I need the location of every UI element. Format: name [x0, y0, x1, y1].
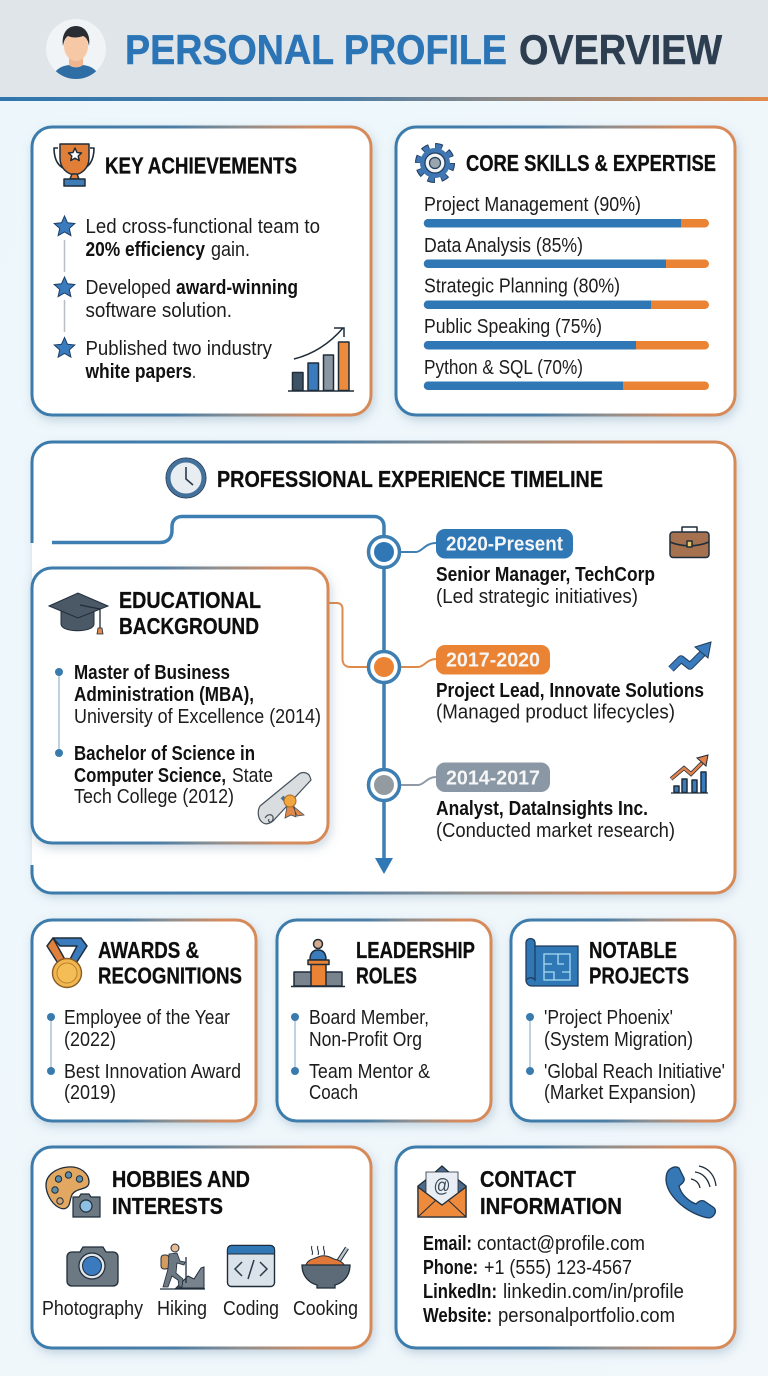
achievements text: Published two industry — [86, 338, 272, 360]
icon: trophy — [54, 144, 94, 186]
achievements text — [85, 216, 320, 383]
bullet rail — [526, 1013, 534, 1075]
heading: NOTABLE — [589, 937, 677, 963]
website line — [423, 1305, 675, 1327]
heading — [356, 937, 475, 988]
heading: BACKGROUND — [119, 613, 259, 639]
entry: 2014-2017: (Conducted market research) — [436, 820, 675, 842]
hobby: coding — [223, 1246, 279, 1320]
timeline connectors — [329, 543, 436, 785]
skill: python and sql: Python & SQL (70%) — [424, 357, 583, 379]
icon: clock — [166, 458, 206, 498]
degree: bachelor: Bachelor of Science in — [74, 743, 255, 765]
skill: strategic planning: Strategic Planning (80%) — [424, 276, 620, 298]
projects list: (System Migration) — [544, 1029, 693, 1051]
timeline axis with arrow — [52, 516, 393, 874]
heading: HOBBIES AND — [112, 1166, 250, 1192]
awards list: Best Innovation Award — [64, 1061, 241, 1083]
icon: gear — [418, 146, 452, 180]
icon: medal — [47, 938, 87, 988]
panel: notable projects — [511, 920, 735, 1121]
roles list — [309, 1007, 431, 1104]
entry: 2014-2017 — [436, 762, 675, 842]
icon: bar chart with arrow — [288, 328, 354, 391]
header band — [0, 0, 768, 101]
degree: bachelor: Computer Science, — [74, 765, 226, 787]
entry: 2017-2020: 2017-2020 — [446, 650, 540, 672]
hobby: cooking: Cooking — [293, 1298, 358, 1320]
awards list: Employee of the Year — [64, 1007, 230, 1029]
heading — [112, 1166, 250, 1219]
heading: AWARDS & — [98, 937, 199, 963]
icon: telephone — [666, 1166, 716, 1218]
entry: 2014-2017: Analyst, DataInsights Inc. — [436, 798, 648, 820]
entry: 2020-present: 2020-Present — [446, 534, 563, 556]
entry: 2017-2020 — [436, 645, 704, 724]
achievements text: software solution. — [86, 300, 232, 322]
panel: awards and recognitions — [32, 920, 256, 1121]
heading: LEADERSHIP — [356, 937, 475, 963]
bullet rail — [55, 668, 63, 757]
roles list: Team Mentor & — [309, 1061, 431, 1083]
skill: python and sql — [424, 357, 709, 390]
icon: briefcase — [670, 527, 709, 558]
panel: hobbies and interests — [32, 1147, 371, 1348]
heading: EDUCATIONAL — [119, 587, 261, 613]
node: 2017-2020 — [368, 652, 400, 682]
node: 2014-2017 — [368, 770, 400, 800]
achievements text: 20% efficiency — [86, 239, 206, 261]
icon: blueprint — [526, 938, 578, 986]
entry: 2014-2017: 2014-2017 — [446, 768, 540, 790]
achievements text: Led cross-functional team to — [86, 216, 320, 238]
panel: experience timeline — [32, 442, 735, 893]
icon: avatar — [46, 19, 106, 80]
linkedin line — [423, 1281, 684, 1303]
icon: graduation cap — [49, 593, 108, 634]
achievements text: white papers — [85, 361, 192, 383]
website line: personalportfolio.com — [498, 1305, 675, 1327]
email line: contact@profile.com — [477, 1233, 645, 1255]
entry: 2017-2020: (Managed product lifecycles) — [436, 702, 675, 724]
panel: core skills — [396, 127, 735, 415]
bullet rail — [47, 1013, 55, 1075]
heading: ROLES — [356, 962, 417, 988]
degree: mba: Master of Business — [74, 662, 230, 684]
heading: KEY ACHIEVEMENTS — [105, 152, 297, 178]
website line: Website: — [423, 1305, 492, 1327]
phone line: Phone: — [423, 1257, 478, 1279]
skill: public speaking — [424, 316, 709, 350]
projects list: 'Project Phoenix' — [544, 1007, 673, 1029]
entry: 2020-present: Senior Manager, TechCorp — [436, 564, 655, 586]
projects list — [544, 1007, 725, 1104]
entry: 2020-present — [436, 529, 655, 608]
achievements text: . — [192, 361, 196, 383]
heading: CONTACT — [480, 1166, 576, 1192]
degree: mba: University of Excellence (2014) — [74, 706, 321, 728]
awards list — [64, 1007, 241, 1104]
heading — [589, 937, 689, 988]
skill: project management — [424, 194, 709, 228]
heading: RECOGNITIONS — [98, 962, 242, 988]
degree: bachelor: Tech College (2012) — [74, 786, 234, 808]
skill: project management: Project Management (90%) — [424, 194, 641, 216]
linkedin line: linkedin.com/in/profile — [503, 1281, 684, 1303]
degree: mba — [74, 662, 321, 728]
email line: Email: — [423, 1233, 472, 1255]
achievements text: award-winning — [176, 277, 298, 299]
icon: diploma scroll — [258, 773, 311, 824]
linkedin line: LinkedIn: — [423, 1281, 497, 1303]
node: 2020-present — [368, 536, 400, 568]
roles list: Non-Profit Org — [309, 1029, 422, 1051]
phone line — [423, 1257, 632, 1279]
projects list: (Market Expansion) — [544, 1082, 696, 1104]
skill: data analysis — [424, 235, 709, 268]
degree: mba: Administration (MBA), — [74, 684, 254, 706]
icon: envelope — [418, 1166, 466, 1217]
panel: key achievements — [32, 127, 371, 415]
heading — [98, 937, 242, 988]
skill: data analysis: Data Analysis (85%) — [424, 235, 583, 257]
entry: 2020-present: (Led strategic initiatives) — [436, 586, 638, 608]
heading — [119, 587, 261, 639]
skill: public speaking: Public Speaking (75%) — [424, 316, 602, 338]
hobby: cooking — [293, 1246, 358, 1320]
timeline connector lines — [64, 240, 66, 332]
title: PERSONAL PROFILE — [125, 26, 507, 73]
icon: palette and camera — [46, 1167, 100, 1217]
bullet rail — [291, 1013, 299, 1075]
skill: strategic planning — [424, 276, 709, 309]
heading: INTERESTS — [112, 1193, 223, 1219]
awards list: (2019) — [64, 1082, 116, 1104]
icon: speaker at podium — [291, 940, 345, 986]
hobby: photography: Photography — [42, 1298, 143, 1320]
hobby: hiking — [157, 1244, 207, 1320]
entry: 2017-2020: Project Lead, Innovate Solutions — [436, 680, 704, 702]
hobby: coding: Coding — [223, 1298, 279, 1320]
roles list: Board Member, — [309, 1007, 429, 1029]
panel: contact information — [396, 1147, 735, 1348]
degree: bachelor: State — [232, 765, 273, 787]
heading: PROFESSIONAL EXPERIENCE TIMELINE — [217, 466, 603, 492]
icon: chart with arrow — [671, 755, 708, 793]
phone line: +1 (555) 123-4567 — [484, 1257, 632, 1279]
heading — [480, 1166, 622, 1219]
hobby: hiking: Hiking — [157, 1298, 207, 1320]
hobby: photography — [42, 1247, 143, 1320]
degree: bachelor — [74, 743, 273, 808]
projects list: 'Global Reach Initiative' — [544, 1061, 725, 1083]
panel: educational background — [32, 568, 328, 843]
achievements text: gain. — [211, 239, 250, 261]
icon: star bullets — [54, 216, 75, 357]
title: OVERVIEW — [519, 26, 722, 73]
icon: envelope: @ — [434, 1176, 450, 1197]
heading: INFORMATION — [480, 1193, 622, 1219]
panel: leadership roles — [277, 920, 491, 1121]
heading: PROJECTS — [589, 962, 689, 988]
roles list: Coach — [309, 1082, 358, 1104]
icon: growth arrow — [671, 642, 711, 669]
achievements text: Developed — [86, 277, 171, 299]
awards list: (2022) — [64, 1029, 116, 1051]
